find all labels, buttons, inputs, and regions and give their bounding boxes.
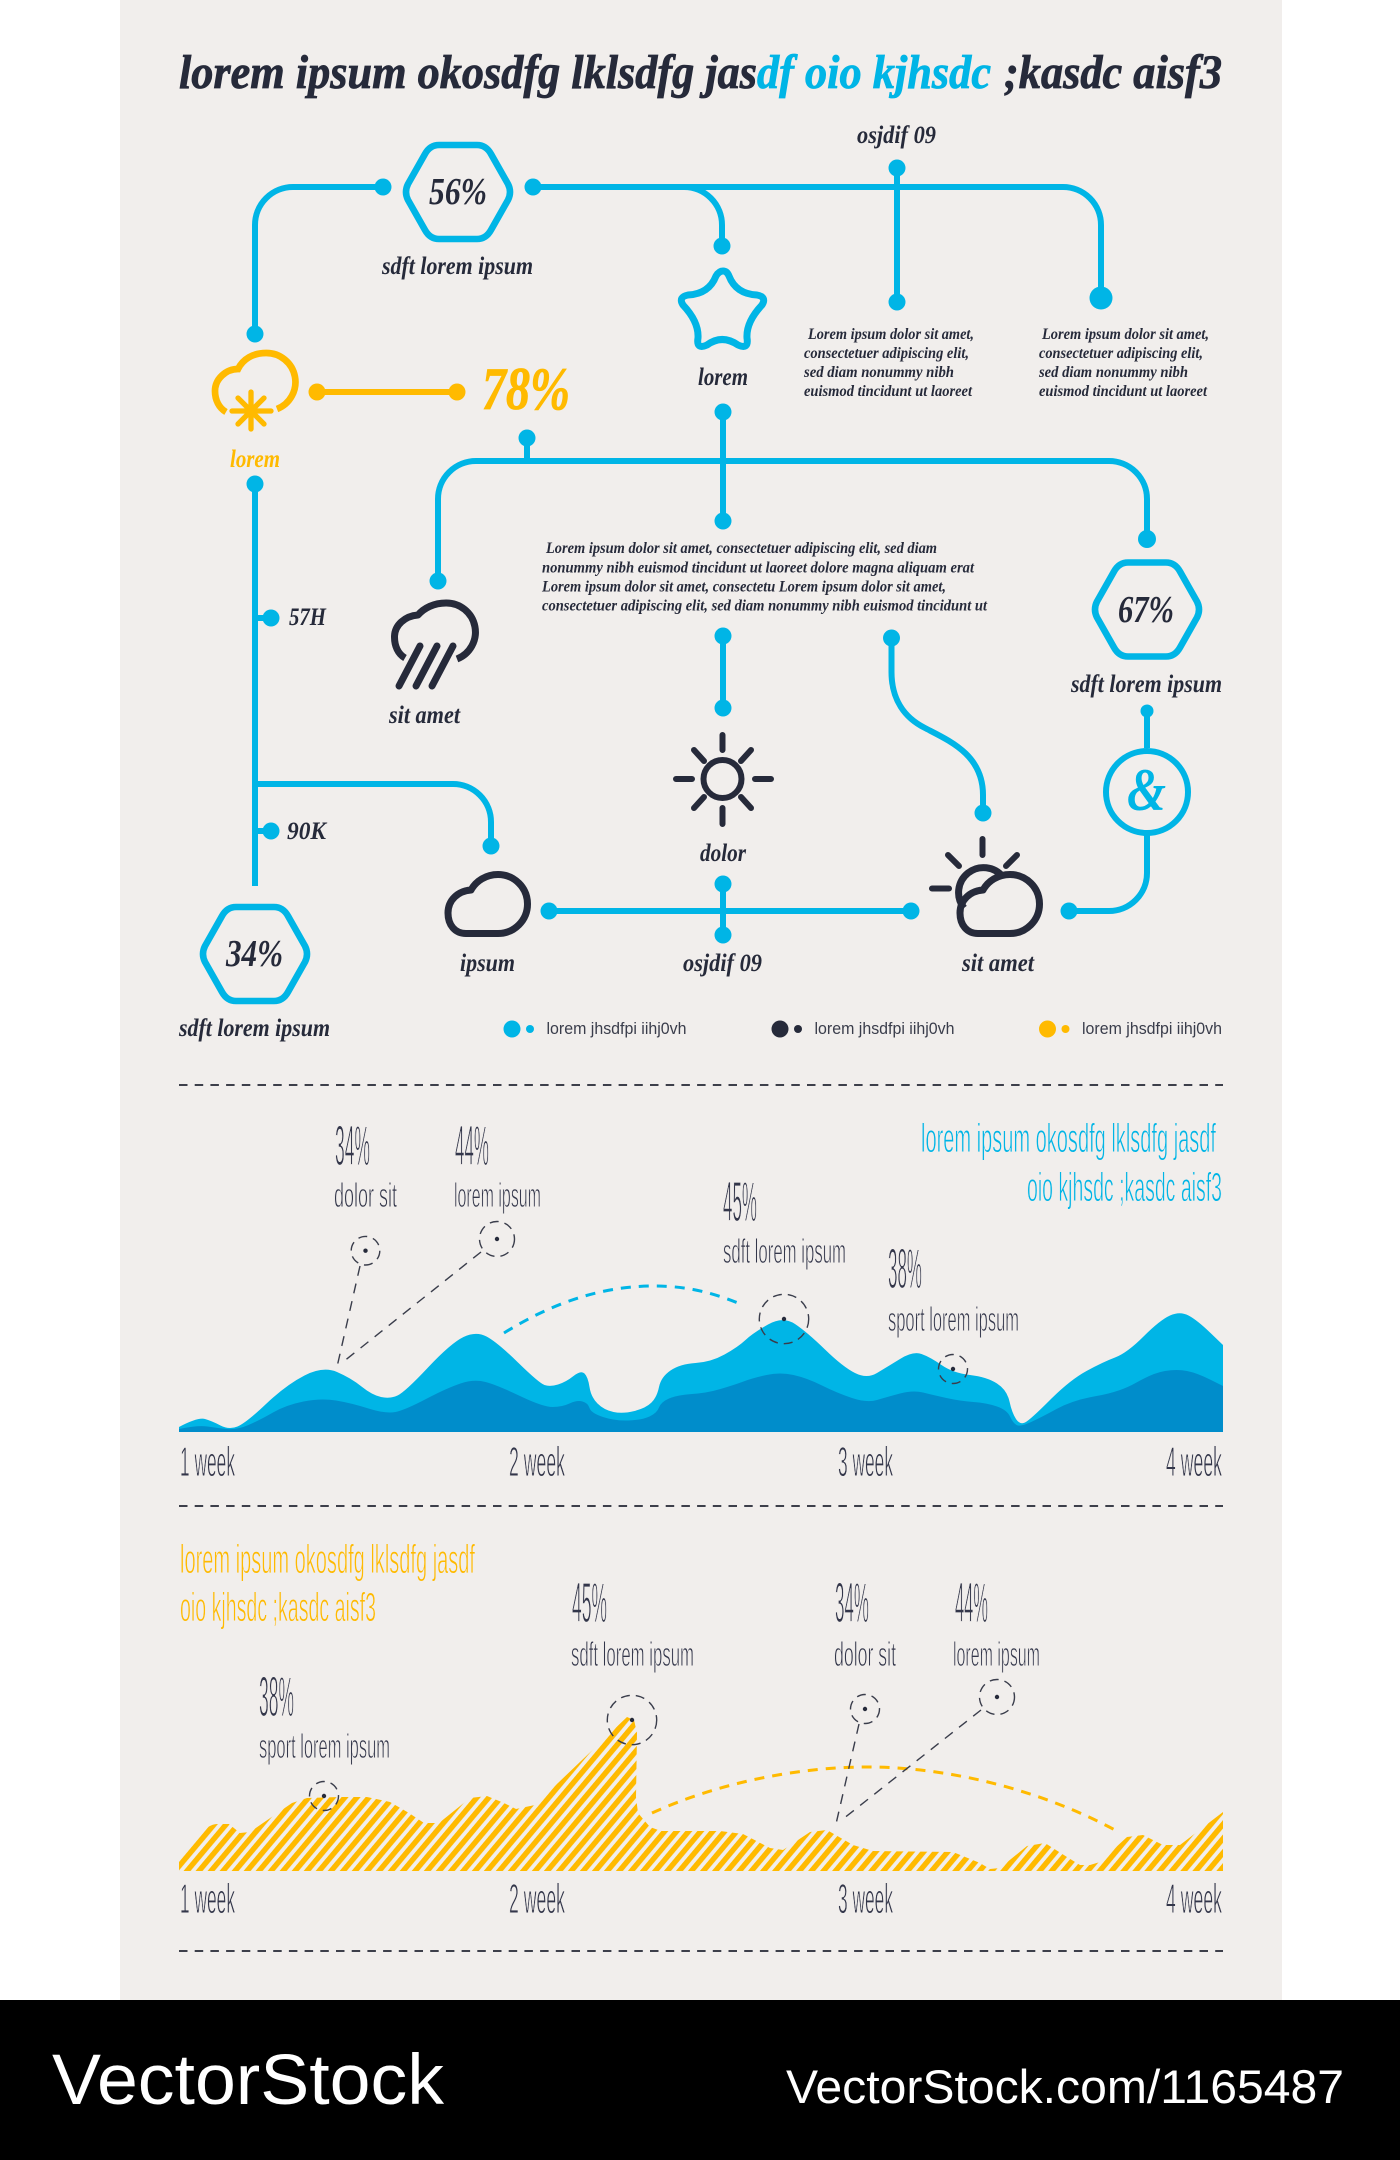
text: sdft lorem ipsum (723, 1233, 846, 1271)
week axis: yellow chart: 2 week (509, 1875, 565, 1922)
footer bar (0, 2000, 1400, 2160)
week axis: blue chart (180, 1438, 1222, 1485)
week axis: blue chart: 1 week (180, 1438, 235, 1485)
text block: top right paragraph: Lorem ipsum dolor sit amet, (1041, 326, 1209, 343)
label: 90K: 90K (287, 818, 328, 845)
hexagon stat: 67% (1070, 562, 1222, 698)
text block: centre paragraph: Lorem ipsum dolor sit amet, consectetu Lorem ipsum dolor sit amet, (541, 578, 946, 596)
label: 57H: 57H (289, 604, 327, 631)
callout: 45% sdft lorem ipsum (yellow): 45% (572, 1571, 607, 1635)
area chart: yellow striped (179, 1717, 1223, 1871)
dashed arc: blue (504, 1286, 738, 1333)
heading: yellow chart (180, 1536, 475, 1630)
week axis: yellow chart: 1 week (180, 1875, 235, 1922)
callout: 34% dolor sit: 34% (335, 1114, 370, 1178)
hexagon stat: 34%: 34% (225, 933, 283, 975)
stat: 78% with connector (308, 356, 570, 422)
heading: blue chart (921, 1115, 1222, 1210)
label: osjdif 09 top: osjdif 09 (857, 122, 936, 149)
text: 4 week (1166, 1875, 1222, 1922)
text block: centre paragraph: Lorem ipsum dolor sit amet, consectetuer adipiscing elit, sed diam (545, 540, 937, 557)
icon: sun behind cloud with label: sit amet (961, 950, 1035, 977)
icon: cloud with label: ipsum (460, 950, 515, 977)
text: lorem ipsum (454, 1177, 541, 1215)
text: 4 week (1166, 1438, 1222, 1485)
text: sdft lorem ipsum (571, 1636, 694, 1674)
label: osjdif 09 bottom: osjdif 09 (683, 950, 762, 977)
flow connector lines (255, 168, 1147, 935)
title (179, 46, 1222, 99)
week axis: yellow chart: 3 week (838, 1875, 893, 1922)
hexagon stat: 34%: sdft lorem ipsum (178, 1015, 330, 1042)
dashed arc: yellow (652, 1767, 1115, 1830)
hexagon stat: 67%: sdft lorem ipsum (1070, 671, 1222, 698)
legend (504, 1019, 1222, 1038)
week axis: yellow chart (180, 1875, 1222, 1922)
text block: top right paragraph: sed diam nonummy nibh (1038, 364, 1188, 381)
text: sport lorem ipsum (888, 1301, 1019, 1339)
callout: 34% dolor sit (yellow): 34% (835, 1571, 869, 1635)
icon: rain cloud with label: sit amet (388, 702, 461, 729)
callout: 38% sport lorem ipsum: 38% (888, 1237, 922, 1301)
text block: centre paragraph: consectetuer adipiscing elit, sed diam nonummy nibh euismod tincidunt ut (542, 598, 988, 614)
background panel (120, 0, 1282, 2000)
hexagon stat: 34% (178, 907, 330, 1042)
title: ;kasdc aisf3 (1004, 46, 1222, 99)
callout: 34% dolor sit (334, 1114, 397, 1367)
icon: star with label: lorem (698, 364, 748, 391)
callout: 34% dolor sit: dolor sit (334, 1177, 397, 1215)
hexagon stat: 56%: 56% (429, 171, 487, 213)
text block: top middle paragraph (803, 326, 974, 400)
text block: top right paragraph (1038, 326, 1209, 400)
hexagon stat: 56% (381, 145, 533, 280)
callout: 45% sdft lorem ipsum (yellow) (571, 1571, 694, 1745)
icon: sun with label: dolor (700, 840, 746, 867)
footer bar: VectorStock (52, 2041, 445, 2120)
legend: lorem jhsdfpi iihj0vh (1082, 1019, 1222, 1038)
icon: star with label (681, 271, 764, 391)
callout: 38% sport lorem ipsum (yellow) (259, 1665, 390, 1810)
icon: rain cloud with label (388, 603, 475, 729)
callout: 45% sdft lorem ipsum: 45% (723, 1170, 757, 1234)
hexagon stat: 67%: 67% (1118, 589, 1174, 631)
icon: sun with label (676, 735, 771, 867)
callout: 45% sdft lorem ipsum (723, 1170, 846, 1344)
week axis: blue chart: 2 week (509, 1438, 565, 1485)
week axis: blue chart: 3 week (838, 1438, 893, 1485)
callout: 44% lorem ipsum (yellow): 44% (955, 1571, 988, 1635)
text: lorem ipsum (953, 1636, 1040, 1674)
legend: lorem jhsdfpi iihj0vh (546, 1019, 686, 1038)
connector dots (246, 160, 1156, 944)
title: lorem ipsum okosdfg lklsdfg jas (179, 46, 757, 99)
text block: top middle paragraph: euismod tincidunt ut laoreet (804, 383, 973, 400)
text block: centre paragraph: nonummy nibh euismod tincidunt ut laoreet dolore magna aliquam erat (542, 560, 975, 576)
callout: 38% sport lorem ipsum (888, 1237, 1019, 1384)
callout: 38% sport lorem ipsum (yellow): 38% (259, 1665, 294, 1729)
callout: 44% lorem ipsum (yellow) (843, 1571, 1040, 1819)
text block: top right paragraph: euismod tincidunt ut laoreet (1039, 383, 1208, 400)
footer bar: VectorStock.com/1165487 (786, 2060, 1344, 2113)
stat: 78% with connector: 78% (482, 356, 570, 422)
legend: lorem jhsdfpi iihj0vh (814, 1019, 954, 1038)
icon: sun behind cloud with label (932, 839, 1040, 977)
icon: ampersand circle (1106, 751, 1188, 833)
callout: 34% dolor sit (yellow) (834, 1571, 896, 1824)
title: df oio kjhsdc (757, 46, 991, 99)
text block: top middle paragraph: Lorem ipsum dolor sit amet, (807, 326, 974, 343)
callout: 44% lorem ipsum: 44% (455, 1114, 489, 1178)
text block: top middle paragraph: consectetuer adipiscing elit, (804, 345, 969, 362)
area chart: blue (179, 1313, 1223, 1432)
icon: cloud with label (448, 874, 528, 977)
callout: 44% lorem ipsum (343, 1114, 541, 1362)
text block: top middle paragraph: sed diam nonummy nibh (803, 364, 954, 381)
icon: ampersand circle: & (1127, 757, 1166, 823)
icon: snow cloud with label (215, 353, 295, 473)
text block: centre paragraph (541, 540, 988, 614)
text: sport lorem ipsum (259, 1728, 390, 1766)
text: lorem ipsum okosdfg lklsdfg jasdf (180, 1536, 475, 1582)
heading: yellow chart: oio kjhsdc ;kasdc aisf3 (180, 1584, 376, 1630)
text block: top right paragraph: consectetuer adipiscing elit, (1039, 345, 1203, 362)
hexagon stat: 56%: sdft lorem ipsum (381, 253, 533, 280)
icon: snow cloud with label: lorem (230, 446, 280, 473)
callout: 34% dolor sit (yellow): dolor sit (834, 1636, 896, 1674)
